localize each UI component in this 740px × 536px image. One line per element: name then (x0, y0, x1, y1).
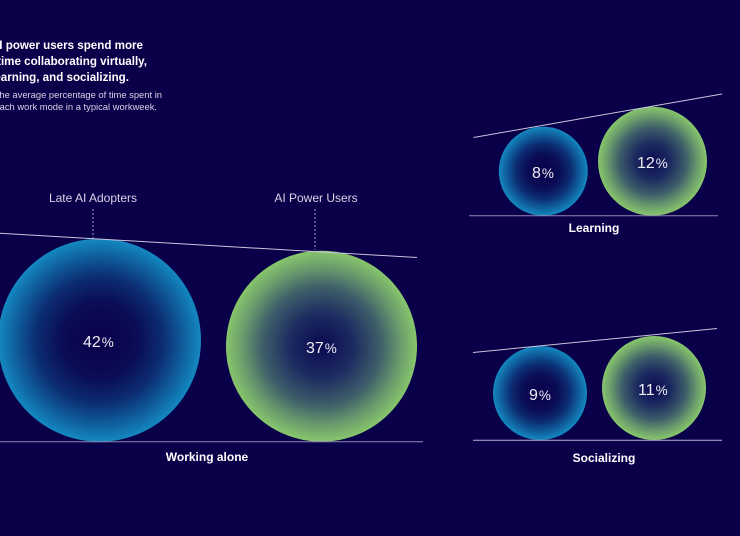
connector: late AI adopters (92, 209, 94, 238)
circle: AI power users 12% (598, 107, 707, 216)
circle: late AI adopters 9% (493, 346, 587, 440)
heading: learning: Learning (569, 221, 619, 235)
trend line (0, 233, 417, 258)
value: 9%: 9% (529, 387, 551, 404)
value: 42%: 42% (83, 334, 114, 351)
baseline (0, 441, 423, 443)
value: 8%: 8% (532, 165, 554, 182)
value: 12%: 12% (637, 155, 668, 172)
label: AI power users: AI Power Users (274, 191, 358, 205)
value: 11%: 11% (638, 382, 668, 399)
value: 37%: 37% (306, 340, 337, 357)
title: time collaborating virtually, (0, 55, 147, 68)
baseline (473, 439, 722, 441)
chart: working alone (0, 191, 423, 464)
circle: AI power users 37% (226, 251, 417, 442)
label: late AI adopters: Late AI Adopters (49, 191, 137, 205)
circle: late AI adopters 42% (0, 239, 201, 442)
connector: AI power users (314, 209, 316, 250)
heading: working alone: Working alone (166, 450, 249, 464)
chart: learning (469, 94, 722, 235)
circle: late AI adopters 8% (499, 127, 588, 216)
baseline (469, 215, 718, 217)
trend line (473, 328, 717, 352)
heading: socializing: Socializing (573, 451, 635, 465)
circle: AI power users 11% (602, 336, 706, 440)
trend line (474, 94, 722, 138)
chart: socializing (473, 328, 722, 465)
